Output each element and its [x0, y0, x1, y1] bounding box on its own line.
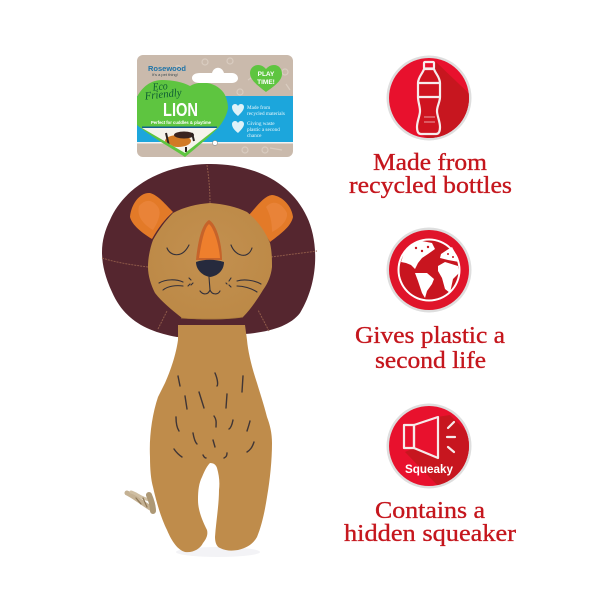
label: hidden squeaker [344, 498, 516, 547]
label: hidden squeaker: Contains a [375, 498, 485, 524]
tag benefit text: recycled materials [247, 111, 285, 117]
product: plush lion toy [102, 164, 317, 557]
head [148, 203, 272, 319]
label: recycled bottles [349, 150, 512, 199]
neck seam [181, 317, 243, 319]
tag benefit hearts [232, 104, 244, 133]
heart titles: Eco [151, 80, 169, 94]
hanging tag: Perfect for cuddles & playtime [151, 120, 212, 125]
tag benefit text: Giving waste [247, 121, 275, 127]
hanging tag: Friendly [143, 87, 182, 103]
nose bridge [196, 220, 222, 260]
nose [196, 260, 224, 277]
brand: It's a pet thing! [152, 72, 178, 77]
tag benefit text: Made from [247, 104, 270, 111]
fur stitches [174, 373, 254, 458]
label: second life: second life [375, 348, 486, 374]
play time heart: PLAY [258, 71, 275, 78]
heart lower panel [142, 128, 217, 153]
icon: squeaky speaker badge [386, 404, 472, 488]
tag card [137, 55, 293, 157]
label: recycled bottles: recycled bottles [349, 173, 512, 199]
icon: bottle [417, 62, 440, 134]
right ear [249, 195, 293, 242]
hanging tag: LION [163, 99, 198, 120]
label: recycled bottles: Made from [373, 150, 487, 176]
icon: globe badge [386, 228, 472, 312]
speaker [404, 417, 455, 458]
face stitches [159, 245, 261, 294]
play time heart: TIME! [257, 79, 275, 86]
left ear [130, 193, 173, 239]
tag benefit text: chance [247, 133, 262, 139]
floor shadow [176, 547, 260, 557]
label: second life [355, 323, 505, 374]
mane [102, 164, 315, 337]
brand [148, 64, 186, 77]
tag confetti pattern [176, 58, 290, 153]
icon: recycled bottle badge [386, 56, 472, 140]
long shadow [422, 62, 469, 138]
tag dog photo [165, 132, 194, 153]
tag benefit text: plastic a second [247, 127, 280, 133]
brand: Rosewood [148, 64, 186, 73]
blue band [137, 96, 293, 142]
label: second life: Gives plastic a [355, 323, 505, 349]
mane seams [102, 165, 317, 331]
tag benefit text [247, 104, 285, 139]
continents [401, 241, 459, 298]
label: hidden squeaker: hidden squeaker [344, 521, 516, 547]
badge text: Squeaky [405, 462, 453, 476]
play time heart [250, 65, 282, 92]
long shadow [405, 415, 469, 486]
hang hole [192, 68, 238, 83]
large green heart [137, 80, 228, 157]
rope tail [127, 492, 153, 511]
hanging tag [137, 55, 293, 157]
continent dots [415, 246, 454, 258]
body [150, 325, 272, 552]
